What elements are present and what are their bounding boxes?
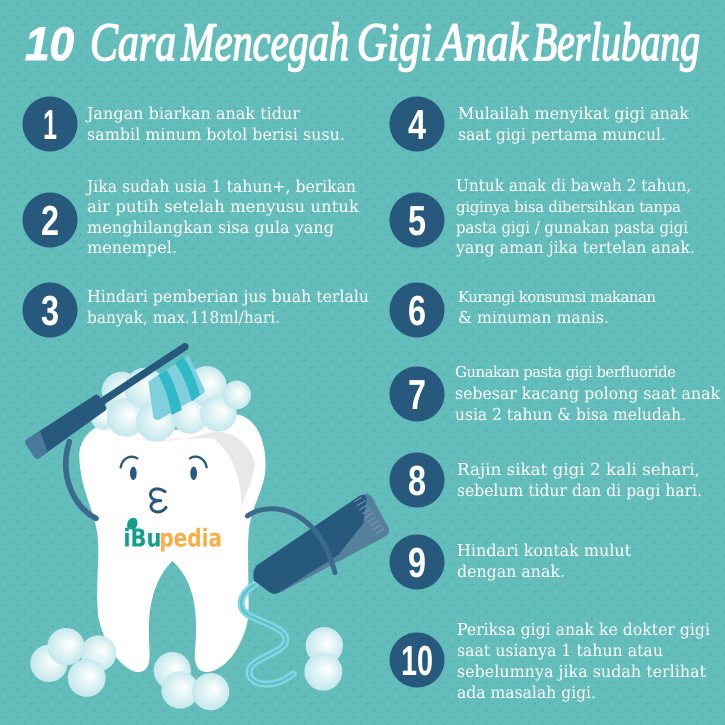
item 9: 9 (408, 539, 426, 586)
item 2 (22, 177, 360, 257)
item 9 (390, 534, 631, 590)
item 3: Hindari pemberian jus buah terlalu (87, 287, 369, 306)
item 10: Periksa gigi anak ke dokter gigi (457, 620, 710, 639)
item 2: menempel. (87, 238, 177, 257)
item 10: saat usianya 1 tahun atau (457, 641, 663, 660)
item 1: sambil minum botol berisi susu. (87, 125, 345, 144)
bubbles bottom left (30, 628, 116, 697)
item 6: & minuman manis. (458, 308, 609, 327)
item 10: ada masalah gigi. (457, 683, 596, 702)
bubbles bottom centre (154, 652, 229, 710)
icon: tooth body (79, 414, 265, 672)
item 6: 6 (408, 287, 426, 334)
item 8: 8 (408, 457, 426, 504)
item 4 (390, 96, 690, 152)
item 2: menghilangkan sisa gula yang (87, 218, 334, 237)
item 4: saat gigi pertama muncul. (458, 125, 666, 144)
icon: toothbrush (25, 347, 205, 459)
item 3: banyak, max.118ml/hari. (87, 308, 280, 327)
foam on tooth (91, 366, 251, 442)
item 2: Jika sudah usia 1 tahun+, berikan (85, 177, 356, 196)
item 6: Kurangi konsumsi makanan (458, 288, 656, 306)
paste squeeze (241, 584, 293, 684)
item 10: 10 (401, 637, 433, 684)
item 6 (390, 282, 656, 338)
item 5: yang aman jika tertelan anak. (455, 238, 695, 257)
item 1 (22, 96, 345, 152)
title: Cara (90, 12, 176, 72)
item 9: dengan anak. (457, 562, 565, 581)
icon: toothpaste tube (253, 494, 389, 594)
item 7 (390, 363, 721, 424)
title: Anak (436, 12, 529, 72)
item 4: Mulailah menyikat gigi anak (458, 104, 690, 123)
item 10 (390, 620, 710, 702)
item 1: 1 (43, 101, 57, 148)
left arm (66, 442, 96, 518)
item 5: giginya bisa dibersihkan tanpa (456, 198, 681, 216)
item 8: sebelum tidur dan di pagi hari. (457, 481, 702, 500)
icon: face (121, 457, 207, 512)
title: Gigi (357, 12, 432, 72)
item 5 (390, 176, 695, 257)
item 9: Hindari kontak mulut (457, 541, 631, 560)
bubbles bottom right (304, 627, 343, 691)
item 8: Rajin sikat gigi 2 kali sehari, (457, 460, 700, 479)
logo: iBupedia: iBu (123, 524, 161, 553)
right arm (247, 509, 335, 573)
item 1: Jangan biarkan anak tidur (85, 104, 300, 123)
item 7: Gunakan pasta gigi berfluoride (455, 363, 676, 381)
item 5: 5 (408, 197, 426, 244)
title: 10 (25, 17, 74, 70)
title (25, 12, 700, 72)
item 8 (390, 452, 702, 508)
item 5: pasta gigi / gunakan pasta gigi (456, 218, 688, 237)
item 3: 3 (41, 287, 59, 334)
item 7: sebesar kacang polong saat anak (455, 384, 721, 403)
item 3 (22, 282, 369, 338)
item 5: Untuk anak di bawah 2 tahun, (456, 176, 691, 195)
title: Mencegah (180, 12, 349, 72)
item 10: sebelumnya jika sudah terlihat (457, 662, 706, 681)
illustration: tooth character (25, 347, 389, 710)
item 4: 4 (408, 101, 426, 148)
shadow on tooth (115, 432, 255, 508)
logo: iBupedia (123, 518, 222, 553)
logo: iBupedia: pedia (159, 524, 222, 553)
item 7: usia 2 tahun & bisa meludah. (455, 405, 686, 424)
item 7: 7 (408, 371, 426, 418)
item 2: 2 (41, 197, 59, 244)
item 2: air putih setelah menyusu untuk (87, 197, 360, 216)
